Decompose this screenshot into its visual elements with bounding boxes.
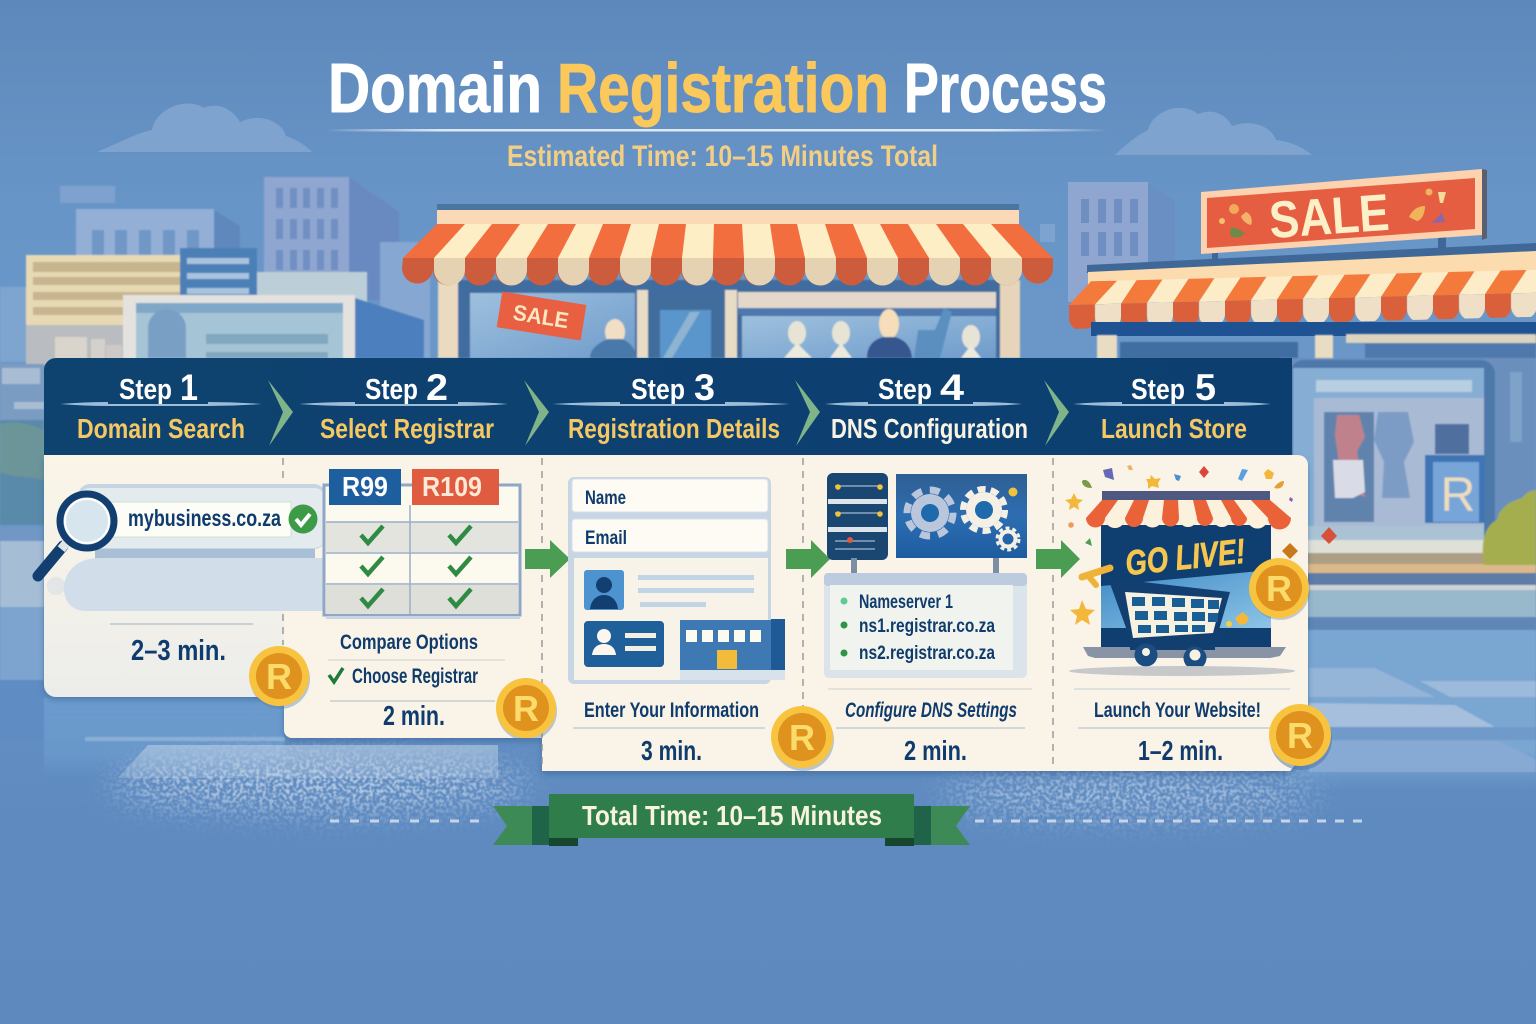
coin 4 (1249, 558, 1310, 620)
go live text: GO LIVE! (1124, 532, 1247, 583)
header: step 3: Registration Details (568, 413, 780, 444)
panel: step 5 launch (1065, 465, 1298, 766)
caption 3: Enter Your Information (584, 699, 759, 722)
confetti diamond (1321, 527, 1337, 544)
name field: Name (585, 488, 626, 509)
header: step 4 (825, 367, 1028, 444)
rooftop sale sign: SALE (1267, 184, 1391, 250)
price table: R109 (422, 471, 482, 502)
total time ribbon (493, 794, 970, 846)
header: step 3: Step (631, 374, 685, 406)
panel: step 4 dns (824, 473, 1032, 766)
header: step 1: Domain Search (77, 413, 245, 444)
search bar (78, 484, 326, 549)
title: Registration (557, 49, 889, 127)
price table (324, 469, 520, 619)
time 2: 2 min. (383, 700, 445, 731)
header: step 5: Step (1131, 374, 1185, 406)
subtitle: Estimated Time: 10–15 Minutes Total (507, 140, 938, 173)
storefront window (438, 280, 1020, 358)
chevron 3 (795, 380, 820, 446)
coin 1: R (266, 656, 292, 697)
coin 5: R (1287, 715, 1313, 756)
choose registrar: Choose Registrar (352, 665, 478, 688)
header: step 2: Select Registrar (320, 413, 494, 444)
confetti (1065, 465, 1298, 625)
panel: step 2 compare registrars (324, 469, 520, 731)
title (328, 49, 1107, 127)
dashed path left (330, 820, 490, 822)
coin 3 (771, 706, 834, 771)
header: step 3 (552, 367, 790, 444)
left cityscape (0, 177, 430, 740)
panel: step 1 domain search (38, 484, 326, 667)
total time ribbon: Total Time: 10–15 Minutes (582, 800, 882, 831)
mist near ground right (940, 775, 1320, 815)
cloud left (97, 104, 312, 152)
centre storefront (402, 204, 1053, 358)
icon: shopping cart (1082, 568, 1249, 670)
laptop shadow (1069, 666, 1295, 676)
title: Domain (328, 49, 542, 127)
time 4: 2 min. (904, 735, 967, 766)
nameserver list: Nameserver 1 (859, 592, 953, 613)
id card icon (584, 621, 664, 667)
icon: building (680, 619, 785, 680)
header: step 2: Step (365, 374, 418, 406)
header: step 5: 5 (1195, 367, 1216, 408)
header: step 2: 2 (426, 367, 448, 408)
sale tag small: SALE (511, 300, 571, 333)
arrow 1 (525, 540, 570, 578)
sale tag small (497, 292, 586, 341)
header: step 1 (60, 367, 262, 444)
chevron 2 (524, 380, 549, 446)
chevron 4 (1044, 380, 1069, 446)
header: step 5: Launch Store (1101, 413, 1247, 444)
nameserver list: ns1.registrar.co.za (859, 616, 995, 637)
header: step 2 (299, 367, 508, 444)
form background (568, 477, 771, 684)
search bar: mybusiness.co.za (128, 505, 281, 531)
arrow 2 (786, 540, 830, 578)
email field (572, 519, 768, 552)
nameserver list (824, 573, 1027, 678)
right window (1097, 334, 1536, 630)
coin 2: R (513, 688, 539, 729)
coin 3: R (789, 717, 815, 758)
icon: storefront laptop (1083, 491, 1291, 658)
header: step 5 (1073, 367, 1271, 444)
compare text: Compare Options (340, 631, 478, 654)
header: step 4: 4 (940, 367, 964, 408)
coin 4: R (1266, 568, 1292, 609)
chevron 1 (268, 380, 293, 446)
email field: Email (585, 528, 627, 549)
awning: roof (402, 224, 1053, 285)
header band (44, 358, 1292, 455)
panel: step 3 registration form (568, 477, 785, 766)
caption 4: Configure DNS Settings (845, 699, 1017, 722)
dashed path right (975, 820, 1362, 822)
time 1: 2–3 min. (131, 635, 226, 667)
icon: magnifying glass (38, 494, 114, 576)
caption 5: Launch Your Website! (1094, 699, 1261, 722)
time 5: 1–2 min. (1138, 735, 1223, 766)
nameserver list: ns2.registrar.co.za (859, 643, 995, 664)
choose registrar (329, 665, 478, 688)
coin 2 (496, 678, 557, 741)
header: step 3: 3 (694, 367, 715, 408)
price table: R99 (342, 471, 388, 502)
street and ground (44, 630, 1536, 790)
name field (572, 479, 768, 512)
arrow 3 (1036, 540, 1080, 578)
header: step 1: Step (119, 374, 172, 406)
icon: server (827, 473, 888, 560)
avatar icon (584, 570, 624, 610)
process panels background (44, 455, 1308, 771)
title: Process (904, 49, 1107, 127)
time 3: 3 min. (641, 735, 702, 766)
coin 5 (1269, 704, 1332, 770)
panel dividers (283, 458, 1053, 768)
header: step 4: Step (878, 374, 932, 406)
cloud right (1115, 108, 1312, 155)
header: step 1: 1 (180, 367, 198, 408)
right awning (1069, 270, 1536, 329)
right window: R (1441, 469, 1475, 522)
rooftop sale sign (1201, 169, 1487, 260)
icon: gears (896, 474, 1027, 558)
search result shadow area (47, 546, 325, 611)
right storefront (1040, 169, 1536, 630)
mist near ground left (110, 745, 530, 811)
coin 1 (249, 646, 310, 709)
header: step 4: DNS Configuration (831, 413, 1028, 444)
